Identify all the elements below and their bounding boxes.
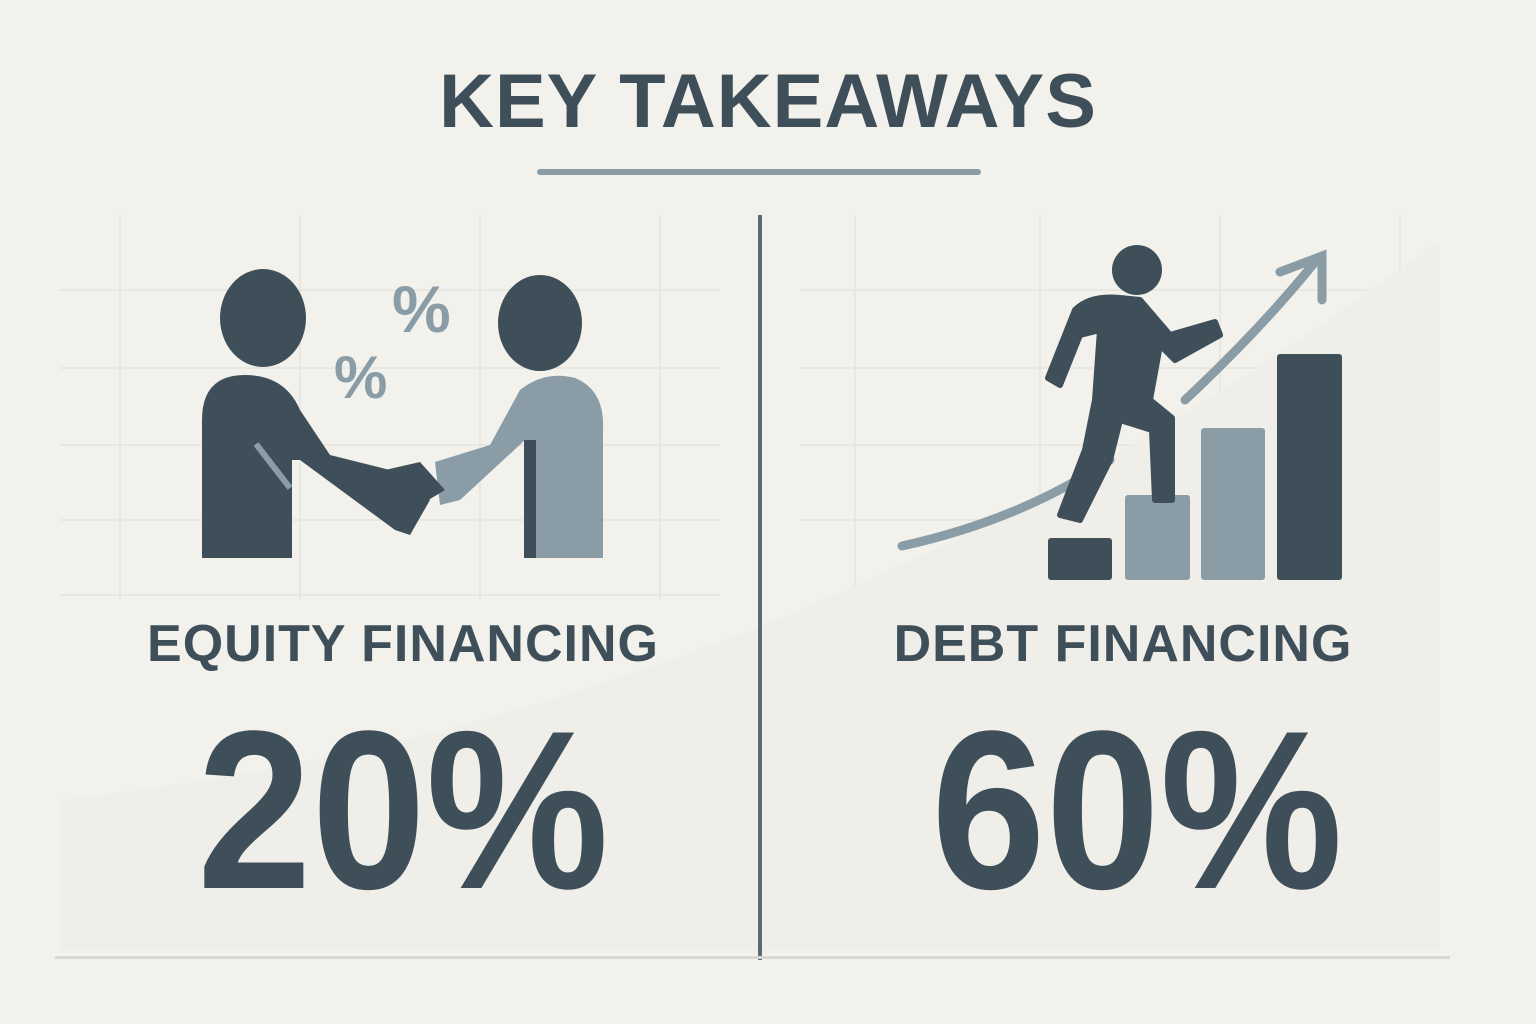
label: debt financing: DEBT FINANCING <box>894 615 1352 673</box>
label: equity financing: EQUITY FINANCING <box>147 615 659 673</box>
stat: 20%: 20% <box>197 683 609 936</box>
icon: climbing person with bar chart <box>898 245 1342 580</box>
stat: 60%: 60% <box>931 683 1343 936</box>
icon: handshake: % <box>392 272 451 346</box>
title: KEY TAKEAWAYS <box>439 59 1097 144</box>
icon: handshake <box>202 269 604 558</box>
vertical divider <box>758 215 762 960</box>
baseline <box>55 956 1450 959</box>
icon: handshake: % <box>334 344 387 411</box>
title underline <box>537 169 981 175</box>
